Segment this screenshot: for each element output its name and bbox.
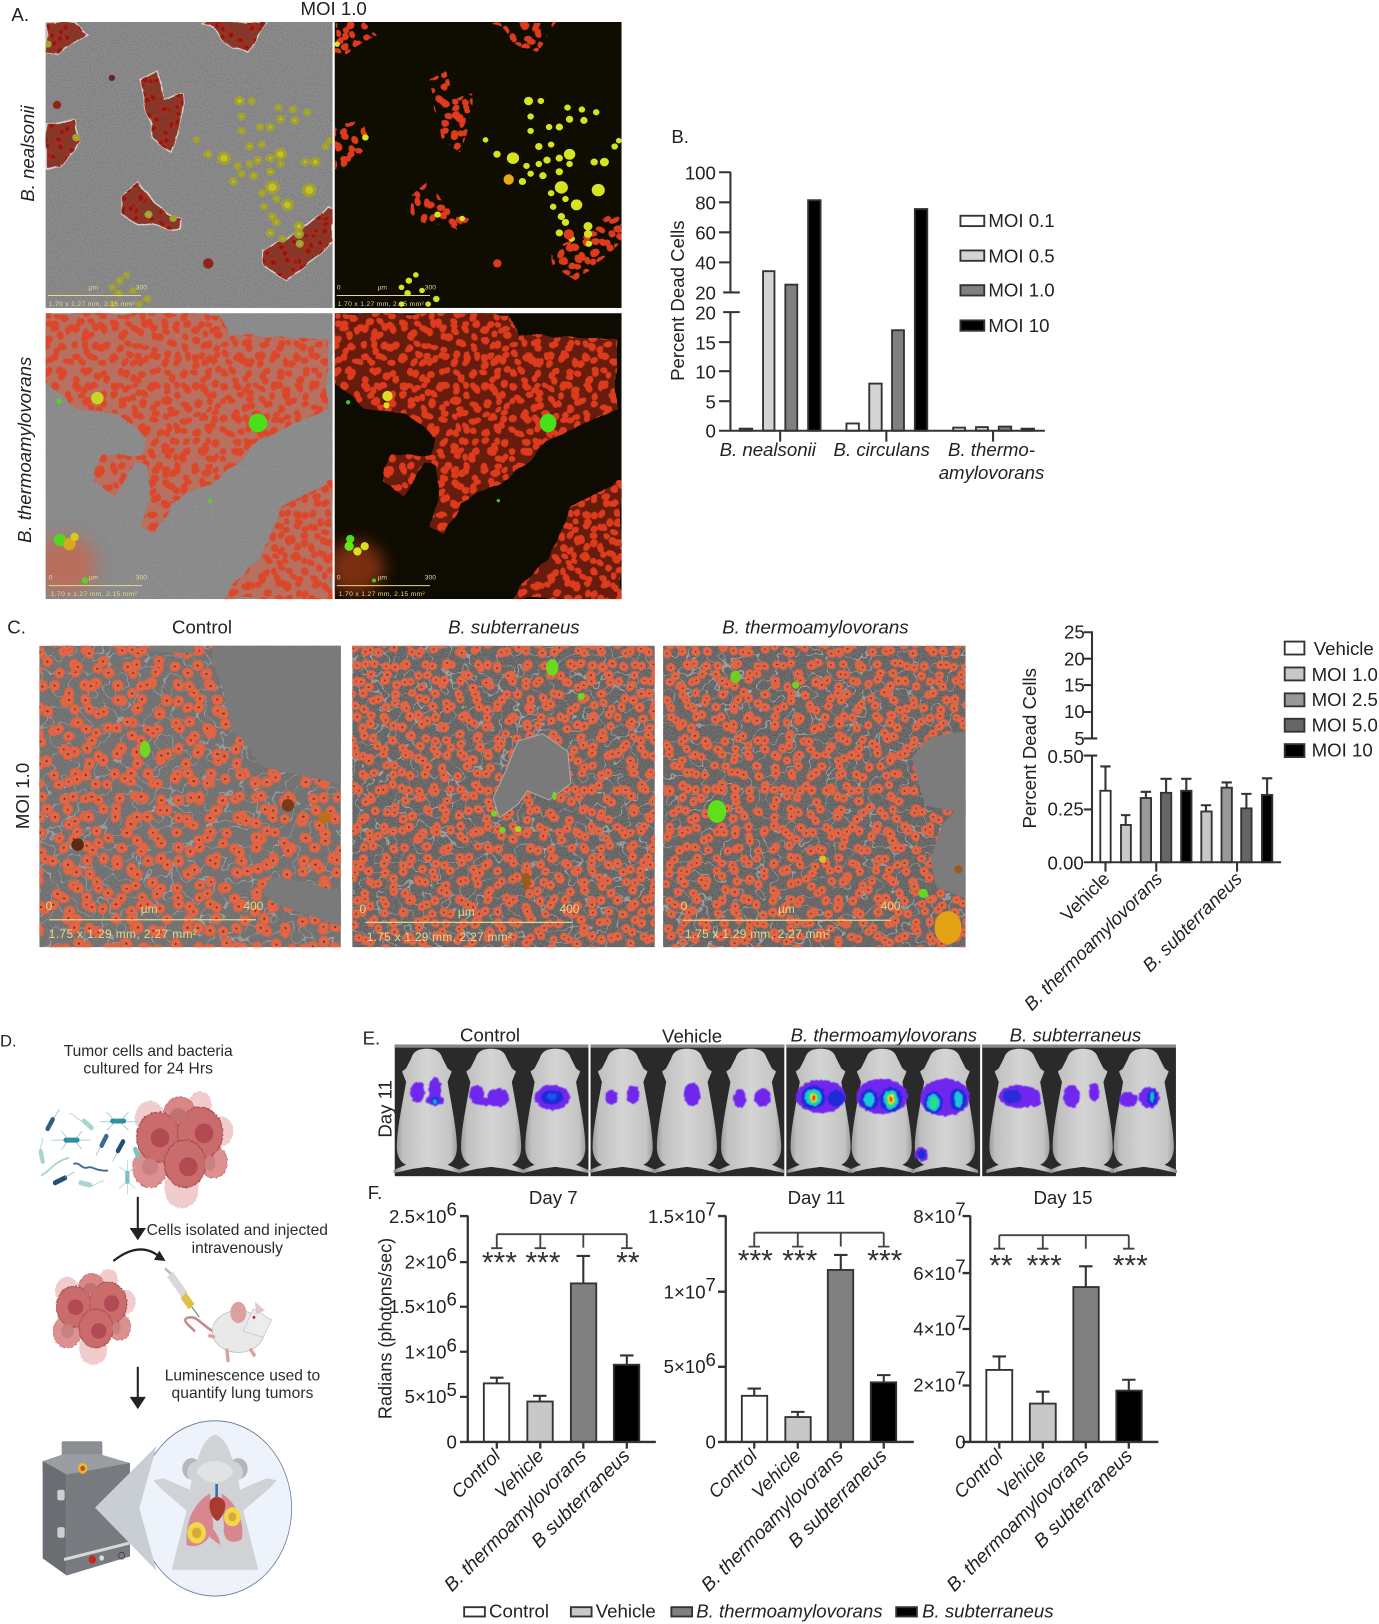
- y tick labels: 2×10: [405, 1251, 447, 1272]
- significance stars: ***: [482, 1247, 517, 1280]
- scale bar C2: 0: [360, 902, 367, 916]
- group title: Control: Control: [460, 1024, 520, 1045]
- panel label F: F.: [368, 1182, 382, 1203]
- legend: panel F: B. thermoamylovorans: [696, 1601, 883, 1622]
- axes: [719, 172, 1045, 442]
- row label: B. thermoamylovorans: B. thermoamylovorans: [14, 357, 35, 543]
- y tick labels: 0: [955, 1432, 966, 1453]
- y-axis title: Percent Dead Cells: [1019, 668, 1040, 829]
- significance stars: [738, 1244, 903, 1277]
- axes: [718, 1216, 914, 1449]
- x labels: B. thermo-: [948, 439, 1035, 460]
- legend: MOI 1.0: [1312, 664, 1378, 685]
- significance stars: ***: [867, 1244, 903, 1277]
- scale bar A2: 0: [337, 284, 341, 291]
- scale bar C1: [46, 899, 264, 941]
- scale bar A2: 1.70 x 1.27 mm, 2.15 mm²: [338, 301, 424, 308]
- bars: [1100, 788, 1272, 862]
- bars: [986, 1287, 1142, 1442]
- axes: [1084, 631, 1281, 872]
- significance bracket: [994, 1235, 1134, 1249]
- scale bar A3: 300: [136, 574, 147, 581]
- scale bar A1: µm: [89, 284, 98, 291]
- column title: B. subterraneus: B. subterraneus: [448, 616, 580, 637]
- y tick labels: 1×10: [405, 1342, 447, 1363]
- y tick labels: 25: [1064, 621, 1085, 642]
- y tick labels: 0: [706, 1432, 716, 1453]
- legend: MOI 10: [988, 315, 1049, 336]
- scale bar A4: 1.70 x 1.27 mm, 2.15 mm²: [339, 591, 426, 598]
- legend: panel F: Control: [489, 1601, 549, 1622]
- step text: culture: cultured for 24 Hrs: [83, 1061, 213, 1078]
- micrograph: B. thermoamylovorans phase overlay: [34, 313, 333, 599]
- row label: B. nealsonii: B. nealsonii: [17, 105, 38, 202]
- significance bracket: [749, 1233, 889, 1247]
- scale bar C1: 0: [46, 899, 53, 913]
- y tick labels: 80: [695, 193, 716, 214]
- y tick labels: 7: [955, 1311, 966, 1332]
- y tick labels: [913, 1199, 966, 1453]
- group title: B. subterraneus: B. subterraneus: [1010, 1024, 1141, 1045]
- legend: panel F: Vehicle: [596, 1601, 656, 1622]
- scale bar A3: 0: [49, 574, 53, 581]
- rotated labels: B subterraneus: [528, 1445, 635, 1552]
- error bars: [490, 1256, 634, 1402]
- significance stars: [482, 1247, 640, 1280]
- rotated labels: B. thermoamylovorans: [698, 1445, 848, 1596]
- scale bar C3: 0: [681, 899, 688, 913]
- column title: Control: Control: [172, 616, 232, 637]
- step text: luminescence: [165, 1367, 320, 1402]
- y tick labels: 5×10: [405, 1386, 447, 1407]
- bar chart: panel C percent dead cells: B. thermoamylovorans: [1020, 868, 1166, 1014]
- significance stars: ***: [738, 1244, 773, 1277]
- scale bar C2: µm: [458, 905, 475, 919]
- y tick labels: 1.5×10: [389, 1296, 447, 1317]
- row label: Day 11: Day 11: [375, 1080, 396, 1138]
- y tick labels: 7: [955, 1199, 966, 1220]
- micrograph: B. thermoamylovorans: [663, 646, 966, 948]
- rotated labels: Control: [704, 1444, 762, 1502]
- scale bar A2: 300: [425, 284, 436, 291]
- step text: injection: Cells isolated and injected: [147, 1222, 328, 1239]
- significance stars: ***: [1113, 1250, 1148, 1283]
- significance stars: [989, 1250, 1148, 1283]
- rotated labels: Vehicle: [490, 1445, 548, 1502]
- y tick labels: 7: [706, 1199, 716, 1220]
- y tick labels: 15: [695, 332, 716, 353]
- panel label A: A.: [11, 4, 29, 25]
- scale bar A1: [48, 284, 147, 308]
- significance stars: **: [989, 1250, 1013, 1283]
- bioluminescence: Control mice: [394, 1045, 588, 1176]
- y tick labels: 2.5×10: [389, 1206, 447, 1227]
- chart title: Day 11: [788, 1187, 845, 1208]
- scale bar C2: 1.75 x 1.29 mm, 2.27 mm²: [367, 930, 512, 944]
- arrow 2: [132, 1367, 144, 1407]
- y tick labels: 5×10: [664, 1356, 706, 1377]
- scale bar C3: 400: [881, 899, 901, 913]
- y tick labels: 6: [447, 1289, 457, 1310]
- bars: [740, 200, 1034, 431]
- scale bar A2: µm: [378, 284, 387, 291]
- step text: luminescence: quantify lung tumors: [171, 1385, 314, 1402]
- column title: B. thermoamylovorans: B. thermoamylovorans: [722, 616, 909, 637]
- y tick labels: 6: [447, 1244, 457, 1265]
- y tick labels: [389, 1199, 457, 1453]
- panel label E: E.: [363, 1028, 380, 1049]
- legend: MOI 0.1: [988, 210, 1055, 231]
- y tick labels: 6: [706, 1349, 716, 1370]
- y tick labels: 7: [706, 1274, 716, 1295]
- x labels: B. nealsonii: [720, 439, 817, 460]
- y tick labels: 2×10: [913, 1375, 955, 1396]
- panel label B: B.: [671, 126, 689, 147]
- rotated labels: Control: [447, 1444, 505, 1502]
- inset circle: [138, 1421, 292, 1596]
- rotated labels: Control: [949, 1444, 1007, 1502]
- scale bar A1: 300: [136, 284, 147, 291]
- y tick labels: 20: [695, 302, 716, 323]
- legend: Vehicle: [1314, 638, 1374, 659]
- legend: panel F: B. subterraneus: [922, 1601, 1054, 1622]
- y tick labels: [685, 162, 716, 441]
- y tick labels: 40: [695, 253, 716, 274]
- row label: MOI 1.0: MOI 1.0: [12, 763, 33, 829]
- legend: MOI 0.5: [988, 245, 1055, 266]
- rotated labels: B. thermoamylovorans: [441, 1445, 591, 1596]
- scale bar C1: 400: [243, 899, 264, 913]
- error bars: [748, 1255, 890, 1417]
- significance stars: ***: [525, 1247, 561, 1280]
- step text: injection: intravenously: [192, 1240, 283, 1257]
- y tick labels: 0: [706, 420, 716, 441]
- y tick labels: 5: [447, 1379, 457, 1400]
- group title: B. thermoamylovorans: B. thermoamylovorans: [791, 1024, 977, 1045]
- legend: MOI 5.0: [1312, 715, 1378, 736]
- y tick labels: 0: [447, 1432, 457, 1453]
- y tick labels: 6×10: [913, 1263, 955, 1284]
- significance stars: ***: [782, 1244, 818, 1277]
- bar chart: Day 11: [648, 1187, 914, 1596]
- scale bar C2: [360, 902, 580, 944]
- bar chart: Day 7: [389, 1187, 656, 1596]
- scale bar C1: µm: [141, 902, 158, 916]
- bioluminescence: B. thermoamylovorans mice: [786, 1045, 980, 1176]
- panel D: experimental schematic: [40, 1043, 328, 1596]
- y tick labels: 20: [695, 283, 716, 304]
- scale bar A2: [337, 284, 436, 308]
- rotated labels: B subterraneus: [1030, 1445, 1137, 1552]
- bioluminescence: Vehicle mice: [590, 1045, 784, 1176]
- y tick labels: 20: [1064, 648, 1085, 669]
- y tick labels: 4×10: [913, 1319, 955, 1340]
- rotated labels: Vehicle: [993, 1445, 1050, 1502]
- scale bar A4: [337, 574, 436, 598]
- y tick labels: 6: [447, 1334, 457, 1355]
- y tick labels: 1×10: [664, 1281, 706, 1302]
- chart title: Day 15: [1033, 1187, 1093, 1208]
- rotated labels: B. thermoamylovorans: [943, 1445, 1094, 1596]
- scale bar C3: µm: [778, 902, 795, 916]
- y tick labels: 0.25: [1047, 799, 1084, 820]
- x labels: B. circulans: [834, 439, 930, 460]
- y tick labels: 7: [955, 1256, 966, 1277]
- step text: culture: Tumor cells and bacteria: [64, 1043, 233, 1060]
- imaging machine: [43, 1441, 130, 1576]
- y tick labels: 0.50: [1047, 746, 1084, 767]
- scale bar C2: 400: [559, 902, 580, 916]
- x labels: amylovorans: [939, 462, 1044, 483]
- scale bar A1: 1.70 x 1.27 mm, 2.15 mm²: [49, 301, 135, 308]
- micrograph: B. subterraneus: [352, 646, 655, 948]
- chart title: Day 7: [529, 1187, 578, 1208]
- axes: [963, 1216, 1158, 1449]
- bars: [484, 1283, 639, 1442]
- bar chart: Day 15: [913, 1187, 1158, 1596]
- y tick labels: 60: [695, 223, 716, 244]
- icon: imaging system and lung inset: [43, 1421, 292, 1596]
- inset mouse: [153, 1434, 277, 1570]
- bars: [742, 1270, 896, 1442]
- y tick labels: 100: [685, 162, 716, 183]
- y tick labels: 8×10: [913, 1206, 955, 1227]
- y-axis title: Percent Dead Cells: [667, 220, 688, 381]
- y tick labels: 5: [1074, 728, 1085, 749]
- rotated labels: B subterraneus: [785, 1445, 892, 1552]
- bar chart: panel B percent dead cells: [667, 162, 1055, 483]
- scale bar A4: µm: [378, 574, 387, 581]
- significance bracket: [491, 1234, 633, 1248]
- bar chart: panel C percent dead cells: [1019, 621, 1378, 1014]
- rotated x labels: Vehicle: [1056, 868, 1113, 925]
- legend: [1285, 638, 1378, 761]
- y-axis title: Radians: Radians (photons/sec): [376, 1238, 396, 1419]
- arrow 1: [132, 1197, 144, 1238]
- panel label C: C.: [7, 616, 26, 637]
- axes: [460, 1216, 656, 1449]
- micrograph: control: [39, 646, 341, 948]
- scale bar C3: [681, 899, 901, 941]
- step text: culture: [64, 1043, 233, 1078]
- step text: injection: [147, 1222, 328, 1257]
- panel label D: D.: [0, 1032, 17, 1051]
- y tick labels: 10: [1064, 701, 1085, 722]
- group title: Vehicle: Vehicle: [662, 1026, 722, 1047]
- x labels: [720, 439, 1044, 483]
- error bars: [993, 1266, 1136, 1404]
- bioluminescence: B. subterraneus mice: [982, 1045, 1177, 1176]
- legend: [960, 210, 1055, 336]
- step text: luminescence: Luminescence used to: [165, 1367, 320, 1384]
- scale bar A3: 1.70 x 1.27 mm, 2.15 mm²: [51, 591, 138, 598]
- legend: MOI 2.5: [1312, 689, 1378, 710]
- scale bar A3: [49, 574, 147, 598]
- error bars: [1100, 766, 1272, 825]
- y tick labels: [648, 1199, 716, 1453]
- scale bar A4: 0: [337, 574, 341, 581]
- legend: panel F: [464, 1601, 1054, 1622]
- y tick labels: 0.00: [1047, 853, 1084, 874]
- bar chart: panel C percent dead cells: B. subterraneus: [1138, 868, 1246, 976]
- significance stars: **: [616, 1247, 640, 1280]
- scale bar C1: 1.75 x 1.29 mm, 2.27 mm²: [49, 927, 197, 941]
- scale bar A3: µm: [89, 574, 98, 581]
- y tick labels: 15: [1064, 674, 1085, 695]
- y tick labels: 5: [706, 391, 716, 412]
- micrograph: B. nealsonii fluorescence: [335, 22, 622, 308]
- micrograph: B. nealsonii phase overlay: [46, 22, 333, 308]
- y tick labels: 7: [955, 1367, 966, 1388]
- icon: bacteria and tumor cells: [40, 1091, 233, 1208]
- rotated labels: Vehicle: [747, 1445, 805, 1502]
- scale bar C3: 1.75 x 1.29 mm, 2.27 mm²: [685, 927, 830, 941]
- icon: tumor cells and injected mouse: [53, 1249, 272, 1365]
- y tick labels: 6: [447, 1199, 457, 1220]
- y tick labels: [1047, 621, 1085, 874]
- legend: MOI 1.0: [988, 280, 1055, 301]
- y tick labels: 1.5×10: [648, 1206, 706, 1227]
- legend: MOI 10: [1312, 740, 1373, 761]
- y tick labels: 10: [695, 361, 716, 382]
- scale bar A4: 300: [425, 574, 436, 581]
- significance stars: ***: [1027, 1250, 1062, 1283]
- micrograph: B. thermoamylovorans fluorescence: [326, 313, 622, 599]
